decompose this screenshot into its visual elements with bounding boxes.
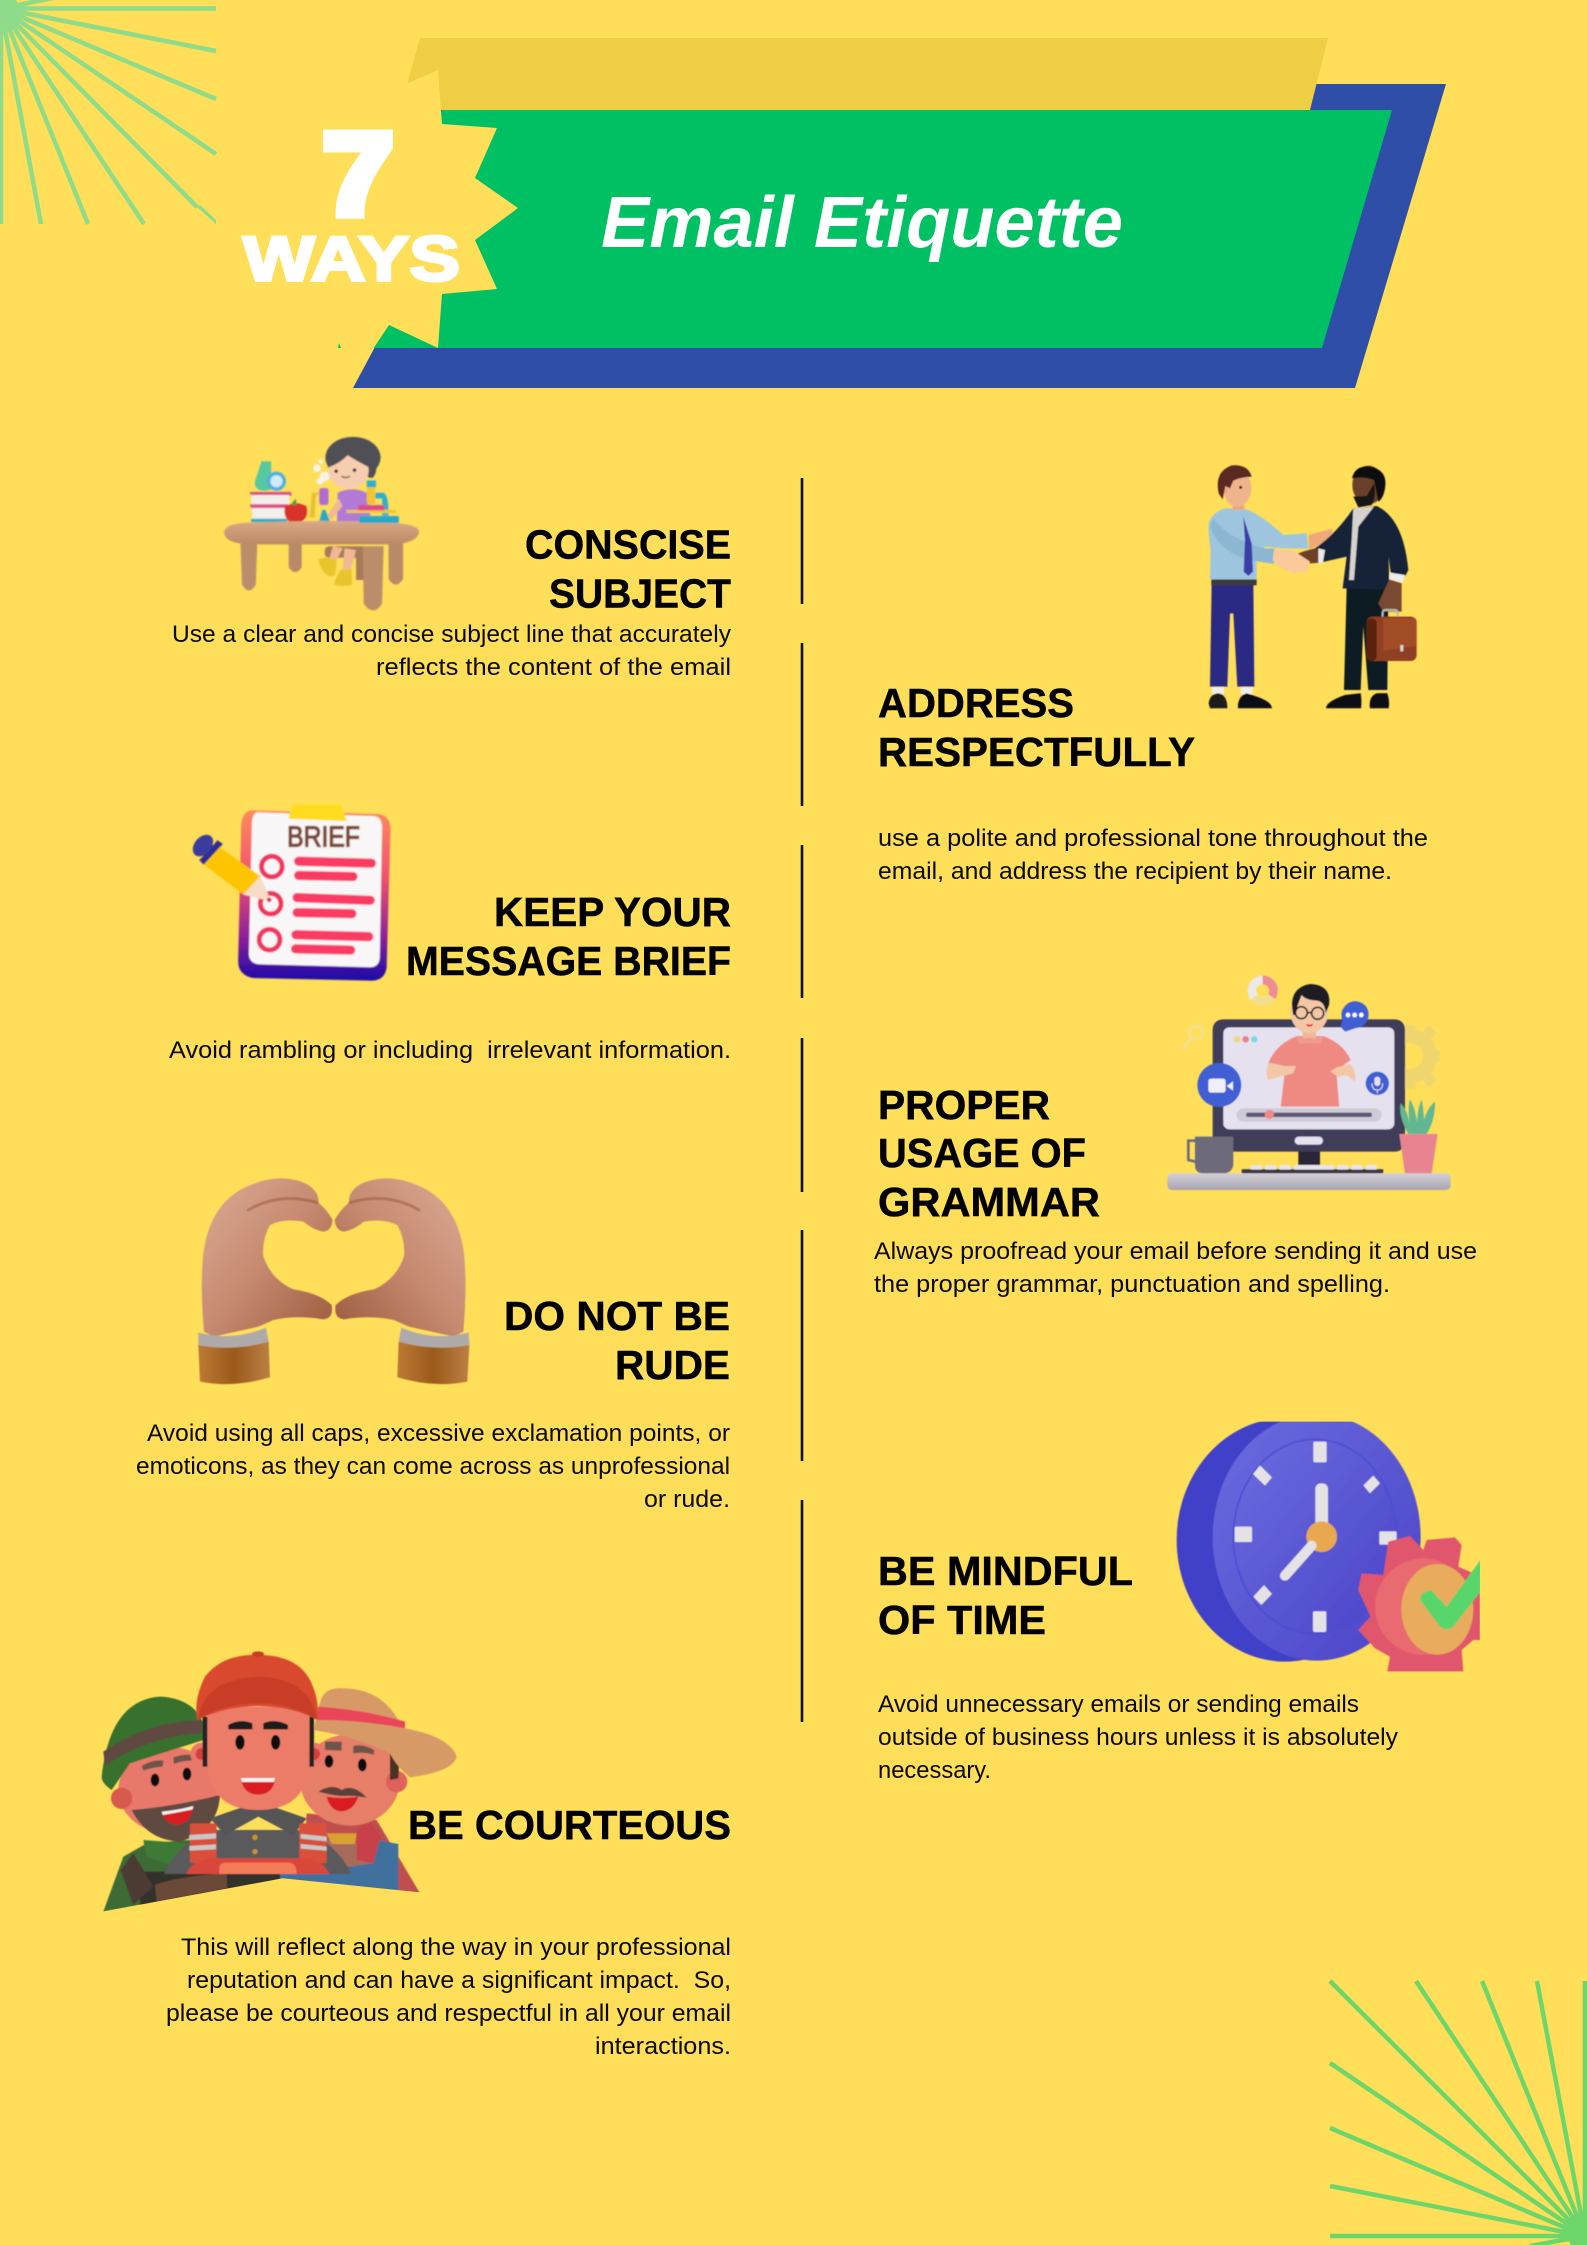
- heading: keep your message brief: KEEP YOUR: [494, 889, 731, 935]
- heading: keep your message brief: [406, 889, 731, 984]
- heading: conscise subject: SUBJECT: [549, 570, 731, 616]
- icon: heart hands: [198, 1178, 469, 1384]
- heading: keep your message brief: MESSAGE BRIEF: [406, 938, 731, 984]
- heading: proper usage of grammar: GRAMMAR: [878, 1179, 1100, 1225]
- icon: man on monitor with desk: [1167, 980, 1451, 1190]
- text: conscise subject description: [172, 621, 732, 681]
- text: rude description: or rude.: [644, 1486, 730, 1513]
- text: rude description: Avoid using all caps, excessive exclamation points, or: [147, 1420, 730, 1447]
- decorative sunburst: top left: [0, 0, 216, 224]
- heading: be mindful of time: [878, 1548, 1133, 1643]
- heading: proper usage of grammar: PROPER: [878, 1082, 1050, 1128]
- heading: address respectfully: [878, 680, 1195, 775]
- icon: businessmen shaking hands: [1209, 465, 1417, 708]
- text: address description: use a polite and professional tone throughout the: [878, 825, 1428, 852]
- text: rude description: emoticons, as they can come across as unprofessional: [136, 1453, 730, 1480]
- text: conscise subject description: reflects the content of the email: [376, 654, 731, 681]
- text: grammar description: the proper grammar, punctuation and spelling.: [874, 1271, 1390, 1298]
- panel: be courteous: [102, 1651, 731, 2060]
- heading: be mindful of time: BE MINDFUL: [878, 1548, 1133, 1594]
- heading: do not be rude: RUDE: [615, 1342, 730, 1388]
- heading: proper usage of grammar: USAGE OF: [878, 1130, 1086, 1176]
- panel: proper usage of grammar: [874, 980, 1477, 1298]
- heading: address respectfully: ADDRESS: [878, 680, 1074, 726]
- text: time description: necessary.: [878, 1757, 991, 1784]
- icon: three smiling workers: [102, 1651, 457, 1912]
- heading: address respectfully: RESPECTFULLY: [878, 729, 1195, 775]
- icon: clock and gear with check: [1177, 1414, 1482, 1672]
- text: courteous description: please be courteous and respectful in all your email: [166, 2000, 731, 2027]
- decorative sunburst: bottom right: [1330, 1981, 1587, 2245]
- panel: do not be rude: [136, 1178, 730, 1513]
- text: courteous description: [166, 1934, 731, 2060]
- panel: keep your message brief: [169, 805, 731, 1064]
- text: address description: [878, 825, 1428, 885]
- big number seven: 7: [323, 111, 393, 239]
- icon: brief clipboard with pencil: [189, 805, 390, 981]
- central dividers: [801, 478, 803, 1722]
- text: courteous description: This will reflect along the way in your professional: [181, 1934, 731, 1961]
- text: time description: [878, 1691, 1399, 1784]
- word ways: WAYS: [243, 224, 460, 294]
- panel: be mindful of time: [878, 1414, 1482, 1784]
- heading: do not be rude: [504, 1293, 730, 1388]
- title banner: [230, 38, 1446, 388]
- text: courteous description: interactions.: [595, 2033, 731, 2060]
- text: rude description: [136, 1420, 730, 1513]
- text: time description: Avoid unnecessary emails or sending emails: [878, 1691, 1359, 1718]
- heading: do not be rude: DO NOT BE: [504, 1293, 730, 1339]
- heading: conscise subject: CONSCISE: [525, 522, 731, 568]
- heading: conscise subject: [525, 522, 731, 616]
- text: grammar description: [874, 1238, 1477, 1298]
- text: courteous description: reputation and can have a significant impact. So,: [187, 1967, 731, 1994]
- heading: be courteous: BE COURTEOUS: [408, 1802, 731, 1848]
- text: address description: email, and address the recipient by their name.: [878, 858, 1392, 885]
- icon: brief clipboard with pencil: BRIEF: [287, 822, 360, 854]
- text: grammar description: Always proofread your email before sending it and use: [874, 1238, 1477, 1265]
- text: time description: outside of business hours unless it is absolutely: [878, 1724, 1399, 1751]
- panel: concise subject: [172, 437, 732, 681]
- panel: address respectfully: [878, 465, 1428, 885]
- text: conscise subject description: Use a clear and concise subject line that accurately: [172, 621, 732, 648]
- banner title: Email Etiquette: [601, 183, 1123, 263]
- text: brief description: Avoid rambling or including irrelevant information.: [169, 1037, 731, 1064]
- heading: proper usage of grammar: [878, 1082, 1100, 1225]
- heading: be mindful of time: OF TIME: [878, 1597, 1046, 1643]
- icon: girl at desk: [224, 437, 419, 610]
